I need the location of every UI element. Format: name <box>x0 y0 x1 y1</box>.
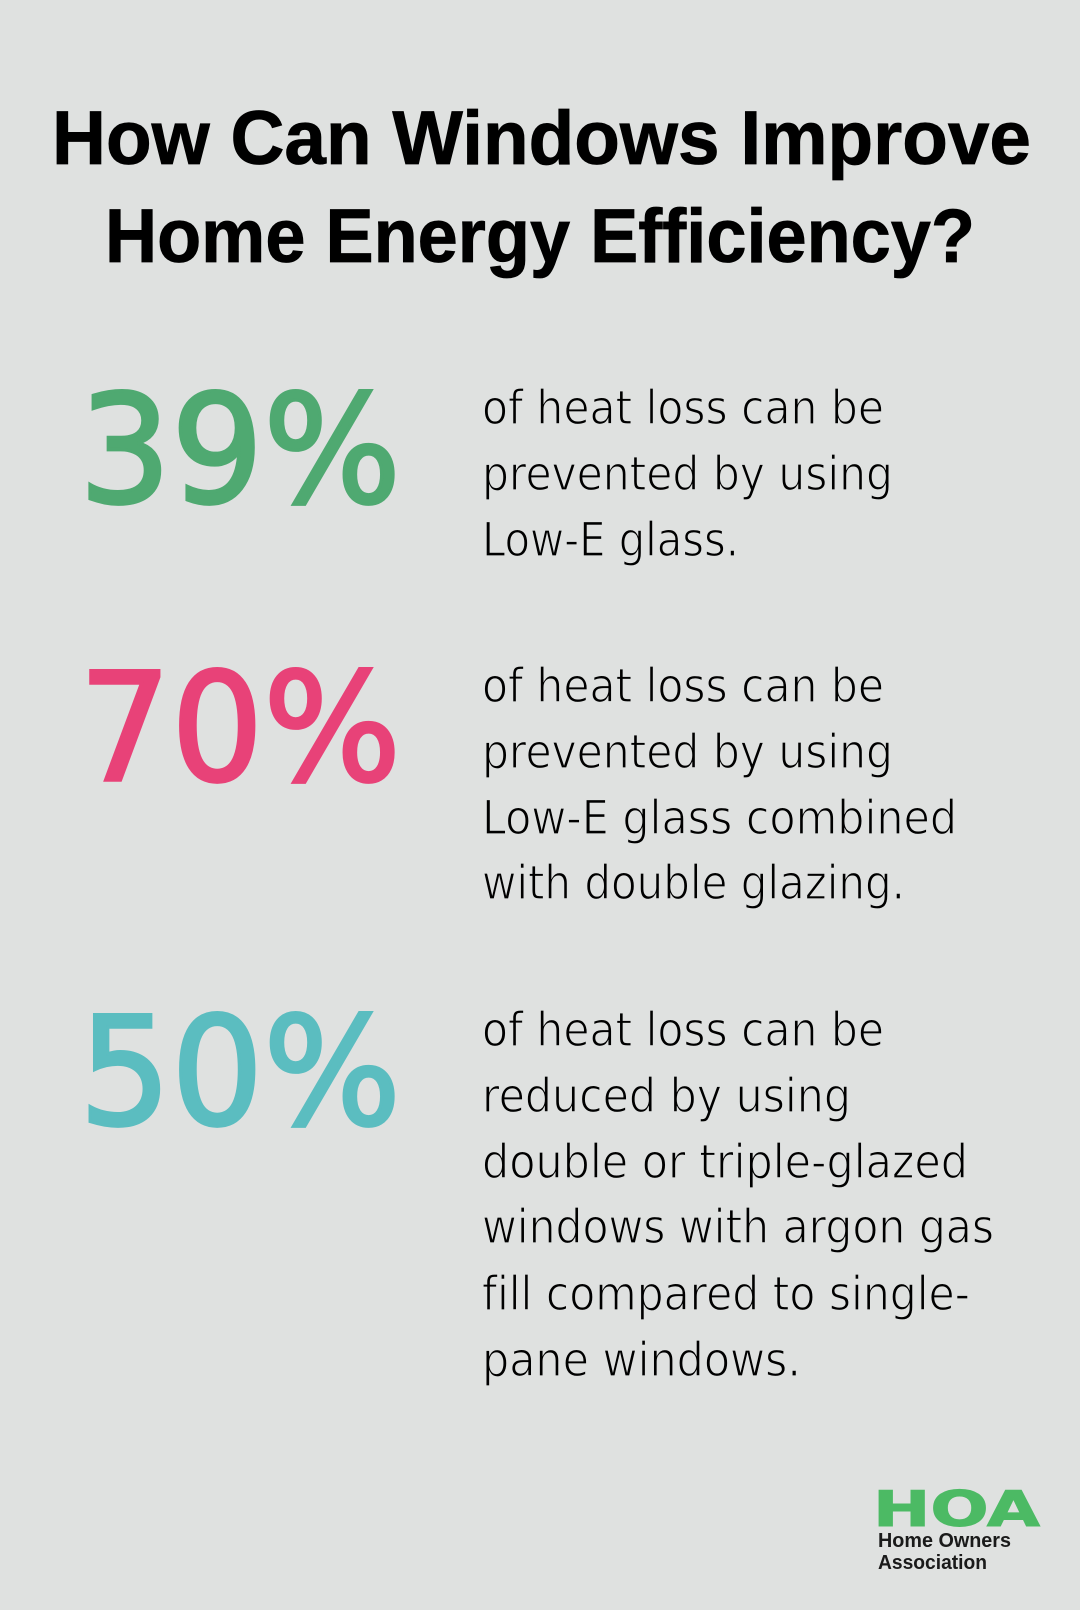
stat row: 50% <box>79 986 994 1388</box>
logo: HOA Home Owners Association <box>873 1481 1040 1574</box>
title: How Can Windows Improve <box>52 96 1031 181</box>
stat description: 70%: of heat loss can be <box>482 659 884 714</box>
title <box>52 96 1031 279</box>
stat description: 50%: reduced by using <box>482 1069 851 1124</box>
stat description: 50%: double or triple-glazed <box>482 1135 968 1190</box>
stat description: 39% <box>482 381 893 568</box>
stat description: 70%: with double glazing. <box>482 856 905 911</box>
stat description: 50% <box>482 1003 994 1388</box>
stat row: 70% <box>79 642 957 911</box>
stat description: 39%: of heat loss can be <box>482 381 884 436</box>
stat description: 39%: prevented by using <box>482 447 893 502</box>
stat description: 70%: prevented by using <box>482 725 893 780</box>
stat number: 70%: 70% <box>79 642 401 816</box>
stat description: 50%: of heat loss can be <box>482 1003 884 1058</box>
stat description: 70% <box>482 659 957 911</box>
stat description: 50%: pane windows. <box>482 1333 801 1388</box>
stat description: 50%: windows with argon gas <box>482 1200 994 1255</box>
stat number: 50%: 50% <box>79 986 401 1160</box>
stat description: 50%: fill compared to single- <box>482 1267 970 1322</box>
stat row: 39% <box>79 364 893 568</box>
stat number: 39%: 39% <box>79 364 401 538</box>
stat description: 39%: Low-E glass. <box>482 513 739 568</box>
title: Home Energy Efficiency? <box>105 194 975 279</box>
stat description: 70%: Low-E glass combined <box>482 791 957 846</box>
logo: HOA Home Owners Association: HOA <box>873 1481 1040 1538</box>
logo: HOA Home Owners Association: Association <box>878 1552 987 1574</box>
logo: HOA Home Owners Association: Home Owners <box>878 1530 1011 1552</box>
